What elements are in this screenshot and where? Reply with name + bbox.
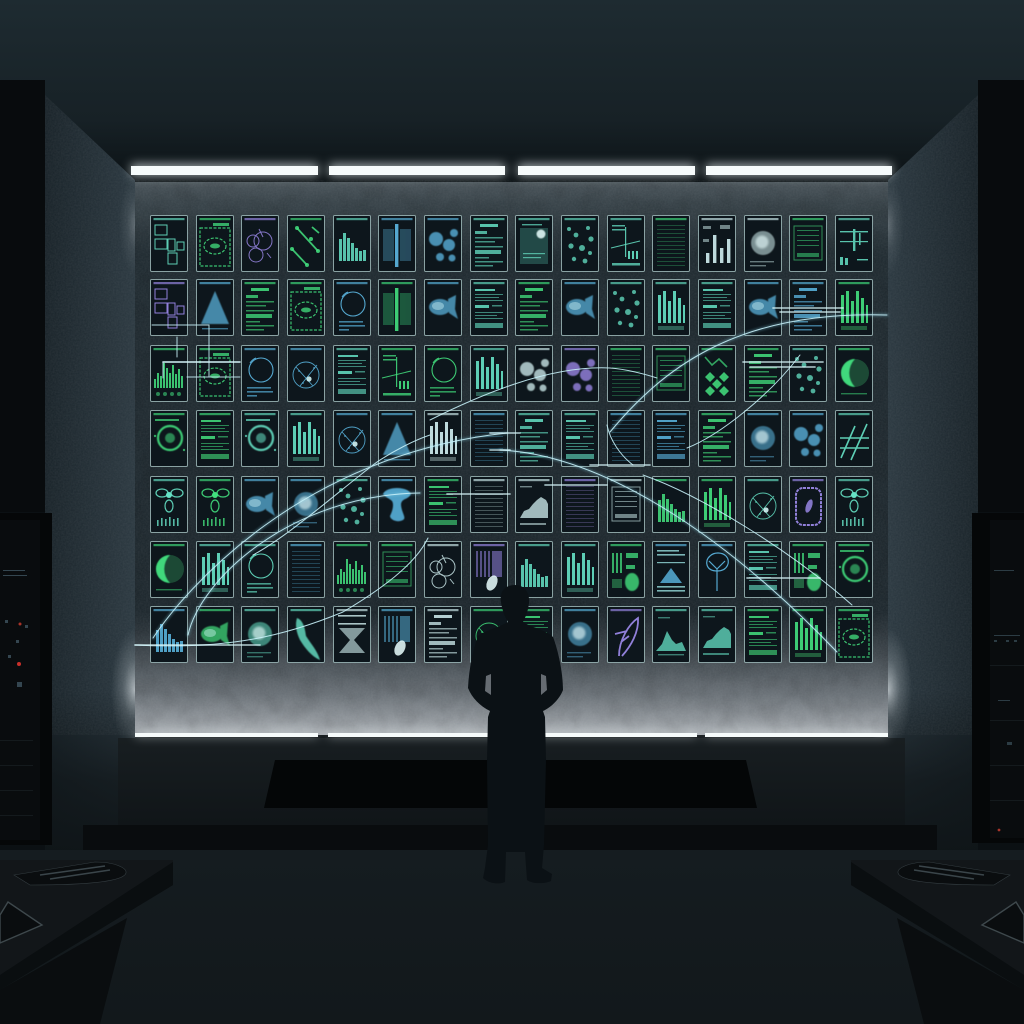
row 7: [150, 606, 872, 662]
card: diagram: [196, 216, 234, 272]
card: chart: [608, 216, 644, 272]
card: ring: [150, 410, 188, 466]
right desk: [851, 860, 1024, 1024]
card: document: [790, 280, 826, 336]
card: map: [652, 346, 690, 402]
card: dim document: [562, 476, 598, 532]
card: ring: [744, 476, 782, 532]
card: document: [196, 410, 234, 466]
card: blobs: [424, 216, 462, 272]
card: blob: [424, 280, 462, 336]
row 5: [150, 476, 872, 532]
left desk: [0, 860, 173, 1024]
row 4: [150, 410, 872, 466]
card: sphere: [744, 410, 782, 466]
card: area: [516, 476, 552, 532]
card: document: [516, 410, 552, 466]
card: chart: [378, 346, 416, 402]
card: diamonds: [698, 346, 736, 402]
card: bars: [470, 346, 508, 402]
person silhouette: [468, 585, 563, 883]
row 3: [150, 346, 872, 402]
bottom light strips: [135, 731, 888, 737]
card: document sphere: [378, 606, 416, 662]
card: scope: [288, 346, 324, 402]
card: dim document: [608, 346, 644, 402]
card: dim document: [652, 216, 690, 272]
card: plaque: [790, 476, 826, 532]
card: blob: [562, 280, 598, 336]
card: document box: [608, 476, 644, 532]
card: document: [744, 346, 782, 402]
card: document: [242, 280, 278, 336]
left server rack: [0, 513, 52, 845]
card: bars: [150, 346, 188, 402]
card: bars: [196, 542, 234, 598]
holographic connection arcs: [135, 308, 887, 652]
card: framed document: [790, 216, 826, 272]
card: blobs: [242, 606, 278, 662]
right server rack: [972, 513, 1024, 843]
card: scatter: [562, 216, 598, 272]
card: bars: [698, 476, 736, 532]
card: spine: [378, 280, 416, 336]
right wall: [864, 95, 978, 855]
right upper wall column: [978, 80, 1024, 512]
card: bars: [652, 280, 690, 336]
card: dim document: [608, 410, 644, 466]
card: bars: [652, 476, 690, 532]
card: circuit: [196, 346, 234, 402]
card: spine: [470, 542, 508, 598]
card: hourglass: [334, 606, 370, 662]
card: bars: [698, 216, 736, 272]
card: boxes: [150, 280, 188, 336]
card: bars: [562, 542, 598, 598]
card: sphere: [562, 606, 598, 662]
ceiling: [0, 0, 1024, 185]
card: blob: [196, 606, 234, 662]
card: flower: [150, 476, 188, 532]
card: feather: [608, 606, 644, 662]
card: document: [424, 476, 462, 532]
card: feather: [288, 606, 324, 662]
card: ring: [836, 542, 872, 598]
main display wall: [135, 182, 888, 735]
card: document: [516, 606, 552, 662]
card: moon sphere: [744, 216, 782, 272]
card: dim document: [470, 476, 508, 532]
card: scatter: [608, 280, 644, 336]
card: bars and blob: [790, 542, 826, 598]
tablet device: [898, 862, 1010, 885]
card: bars: [516, 542, 552, 598]
card: bars: [424, 410, 462, 466]
card: bars: [790, 606, 826, 662]
card: triangle: [378, 410, 416, 466]
card: bars and blob: [608, 542, 644, 598]
card: mountain: [652, 606, 690, 662]
card: document: [652, 410, 690, 466]
card: circuit: [288, 280, 324, 336]
card: bars: [150, 606, 188, 662]
left upper wall column: [0, 80, 45, 512]
card: document: [744, 606, 782, 662]
card: sphere: [288, 476, 324, 532]
arm gap left: [485, 674, 491, 695]
row 6: [150, 542, 872, 598]
card: document: [698, 410, 736, 466]
card: spine: [378, 216, 416, 272]
card: flower: [836, 476, 872, 532]
card: diagram: [196, 476, 234, 532]
card: cross: [836, 216, 872, 272]
card: sphere: [470, 606, 508, 662]
card: moon: [836, 346, 872, 402]
card: hash: [836, 410, 872, 466]
card: mushroom: [378, 476, 416, 532]
card: boxes: [836, 606, 872, 662]
card: triangle document: [652, 542, 690, 598]
card: document spot: [516, 216, 552, 272]
folder device: [982, 902, 1024, 943]
card: molecules: [288, 216, 324, 272]
card: blobs: [516, 346, 552, 402]
grid of data cards: [150, 216, 872, 662]
card: blobs: [790, 410, 826, 466]
card: ring: [242, 410, 278, 466]
row 1: [150, 216, 872, 272]
card: document: [334, 346, 370, 402]
wall mottling: [135, 182, 888, 735]
card: dim document: [288, 542, 324, 598]
card: scatter: [790, 346, 826, 402]
step block below wall: [83, 738, 937, 850]
arm gap right: [541, 674, 547, 695]
floor: [0, 850, 1024, 1024]
card: bars: [334, 216, 370, 272]
card: document: [424, 606, 462, 662]
card: bars: [836, 280, 872, 336]
card: triangle: [196, 280, 234, 336]
left wall: [45, 95, 159, 855]
card: blobs: [562, 346, 598, 402]
card: ring: [242, 346, 278, 402]
card: bars: [334, 542, 370, 598]
card: ring: [242, 542, 278, 598]
folder device: [0, 902, 42, 943]
card: rings: [424, 542, 462, 598]
card: blob: [744, 280, 782, 336]
card: ring document: [334, 280, 370, 336]
card: document: [698, 280, 736, 336]
card: moon: [150, 542, 188, 598]
wall grain texture: [45, 95, 978, 735]
tablet device: [14, 862, 126, 885]
card: ring: [424, 346, 462, 402]
card: dim sphere: [334, 410, 370, 466]
card: document: [744, 542, 782, 598]
card: tree: [698, 542, 736, 598]
dark inset recess: [264, 760, 757, 808]
card: boxes: [150, 216, 188, 272]
top light strips: [131, 164, 892, 176]
card: document: [378, 542, 416, 598]
card: document: [470, 216, 508, 272]
row 2: [150, 280, 872, 336]
card: dim document: [470, 410, 508, 466]
card: scatter: [334, 476, 370, 532]
card: document: [470, 280, 508, 336]
card: document: [562, 410, 598, 466]
card: blob: [242, 476, 278, 532]
card: rings: [242, 216, 278, 272]
card: document: [516, 280, 552, 336]
card: bars: [288, 410, 324, 466]
card: area: [698, 606, 736, 662]
